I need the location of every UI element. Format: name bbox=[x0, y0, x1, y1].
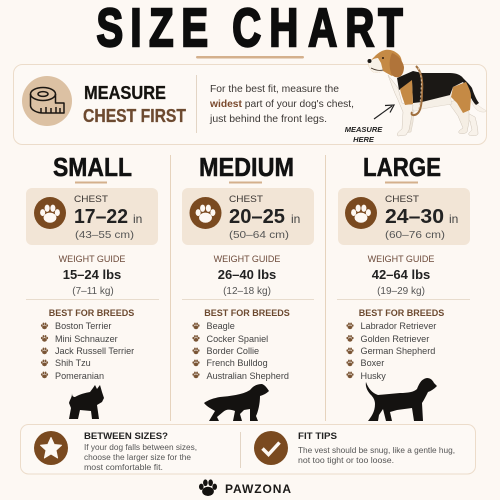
weight guide: small: (7–11 kg) bbox=[72, 286, 114, 297]
weight guide: large: WEIGHT GUIDE bbox=[368, 254, 434, 264]
breeds list: small: BEST FOR BREEDS bbox=[49, 308, 134, 318]
icon: measuring tape bbox=[22, 76, 72, 126]
card: chest small: CHEST bbox=[74, 194, 108, 205]
logo: pawzona: PAWZONA bbox=[225, 482, 291, 496]
callout: measure here bbox=[345, 105, 394, 144]
breeds list: large: Boxer bbox=[360, 358, 384, 368]
illustration: beagle with harness bbox=[368, 50, 487, 136]
black saddle bbox=[397, 71, 479, 105]
text block: between sizes: choose the larger size for the bbox=[84, 453, 192, 462]
icon: check bbox=[254, 431, 288, 465]
tan chest bbox=[400, 80, 413, 105]
breeds list: medium: Border Collie bbox=[206, 346, 259, 356]
breeds list: small: Pomeranian bbox=[55, 371, 104, 381]
weight guide: medium: (12–18 kg) bbox=[223, 286, 271, 297]
far front leg bbox=[404, 110, 414, 133]
far hind leg bbox=[460, 110, 478, 136]
panel: bottom tips bbox=[20, 424, 476, 474]
weight guide: large: 42–64 lbs bbox=[372, 267, 430, 282]
breeds list: small: Boston Terrier bbox=[55, 321, 111, 331]
breeds list: large: German Shepherd bbox=[360, 346, 435, 356]
text block: between sizes: most comfortable fit. bbox=[84, 463, 163, 472]
icon: paw bbox=[345, 197, 377, 229]
text block: fit tips: FIT TIPS bbox=[298, 431, 337, 441]
text block: fit tips bbox=[298, 431, 455, 465]
text block: fit tips: not too tight or too loose. bbox=[298, 456, 394, 465]
heading: measure chest first bbox=[83, 83, 186, 126]
text block: between sizes bbox=[84, 431, 197, 472]
breeds list: small: Shih Tzu bbox=[55, 358, 91, 368]
breeds list: large bbox=[346, 308, 444, 381]
weight guide: medium: 26–40 lbs bbox=[218, 267, 276, 282]
card: chest medium: 20–25 bbox=[229, 206, 285, 228]
card: chest small: (43–55 cm) bbox=[75, 229, 134, 241]
breeds list: medium: Cocker Spaniel bbox=[206, 334, 268, 344]
callout: measure here: HERE bbox=[353, 135, 375, 144]
icon: star bbox=[34, 431, 68, 465]
breeds list: large: Husky bbox=[360, 371, 386, 381]
ear bbox=[390, 53, 404, 77]
icon: paw bbox=[190, 197, 222, 229]
title: SIZECHART bbox=[97, 0, 403, 59]
icon: small dog silhouette bbox=[69, 385, 104, 419]
tail tip bbox=[471, 100, 487, 112]
breeds list: large: Golden Retriever bbox=[360, 334, 429, 344]
heading: medium: MEDIUM bbox=[199, 152, 294, 182]
breeds list: medium: BEST FOR BREEDS bbox=[204, 308, 290, 318]
column: large bbox=[337, 152, 470, 421]
breeds list: small bbox=[41, 308, 134, 381]
card: chest medium: (50–64 cm) bbox=[229, 229, 289, 241]
icon: paw bbox=[34, 197, 66, 229]
column: medium bbox=[182, 152, 314, 421]
text block: fit instruction: For the best fit, measure the bbox=[210, 83, 339, 95]
card: chest medium: CHEST bbox=[229, 194, 263, 205]
card: chest small: in bbox=[133, 212, 142, 226]
weight guide: small: 15–24 lbs bbox=[63, 267, 121, 282]
breeds list: medium: Australian Shepherd bbox=[206, 371, 289, 381]
card: chest small bbox=[26, 188, 158, 245]
column: small bbox=[26, 152, 159, 419]
card: chest large: 24–30 bbox=[385, 206, 444, 228]
logo: pawzona bbox=[199, 479, 291, 496]
head bbox=[368, 50, 402, 76]
weight guide: large bbox=[368, 254, 434, 297]
near hind leg bbox=[448, 100, 469, 134]
weight guide: small bbox=[59, 254, 125, 297]
weight guide: medium: WEIGHT GUIDE bbox=[214, 254, 280, 264]
white muzzle bbox=[368, 58, 383, 73]
breeds list: small: Mini Schnauzer bbox=[55, 334, 118, 344]
tan rump bbox=[451, 82, 471, 113]
heading: measure chest first: MEASURE bbox=[84, 83, 166, 103]
belly bbox=[412, 95, 452, 112]
heading: large: LARGE bbox=[363, 152, 441, 182]
card: chest large bbox=[338, 188, 470, 245]
card: chest medium bbox=[182, 188, 314, 245]
chest and front leg bbox=[388, 75, 413, 136]
text block: fit instruction bbox=[209, 83, 354, 125]
breeds list: large: BEST FOR BREEDS bbox=[359, 308, 444, 318]
icon: large dog silhouette bbox=[366, 378, 437, 421]
text block: between sizes: BETWEEN SIZES? bbox=[84, 431, 168, 441]
breeds list: medium: French Bulldog bbox=[206, 358, 268, 368]
icon: medium dog silhouette bbox=[204, 384, 269, 421]
card: chest medium: in bbox=[291, 212, 300, 226]
text block: fit tips: The vest should be snug, like a gentle hug, bbox=[298, 446, 455, 455]
breeds list: large: Labrador Retriever bbox=[360, 321, 436, 331]
card: chest small: 17–22 bbox=[74, 206, 128, 228]
breeds list: medium: Beagle bbox=[206, 321, 235, 331]
card: chest large: (60–76 cm) bbox=[385, 229, 445, 241]
heading: measure chest first: CHEST FIRST bbox=[83, 106, 186, 126]
breeds list: small: Jack Russell Terrier bbox=[55, 346, 134, 356]
weight guide: small: WEIGHT GUIDE bbox=[59, 254, 125, 264]
breeds list: medium bbox=[192, 308, 290, 381]
weight guide: medium bbox=[214, 254, 280, 297]
harness strap bbox=[412, 66, 422, 115]
text block: between sizes: If your dog falls between sizes, bbox=[84, 443, 197, 452]
text block: fit instruction: just behind the front legs. bbox=[209, 113, 327, 125]
callout: measure here: MEASURE bbox=[345, 125, 383, 134]
card: chest large: in bbox=[449, 212, 458, 226]
text block: fit instruction: widest part of your dog's chest, bbox=[209, 98, 354, 110]
heading: small: SMALL bbox=[53, 152, 132, 182]
card: chest large: CHEST bbox=[385, 194, 419, 205]
panel: measure chest first bbox=[14, 50, 487, 144]
weight guide: large: (19–29 kg) bbox=[377, 286, 425, 297]
